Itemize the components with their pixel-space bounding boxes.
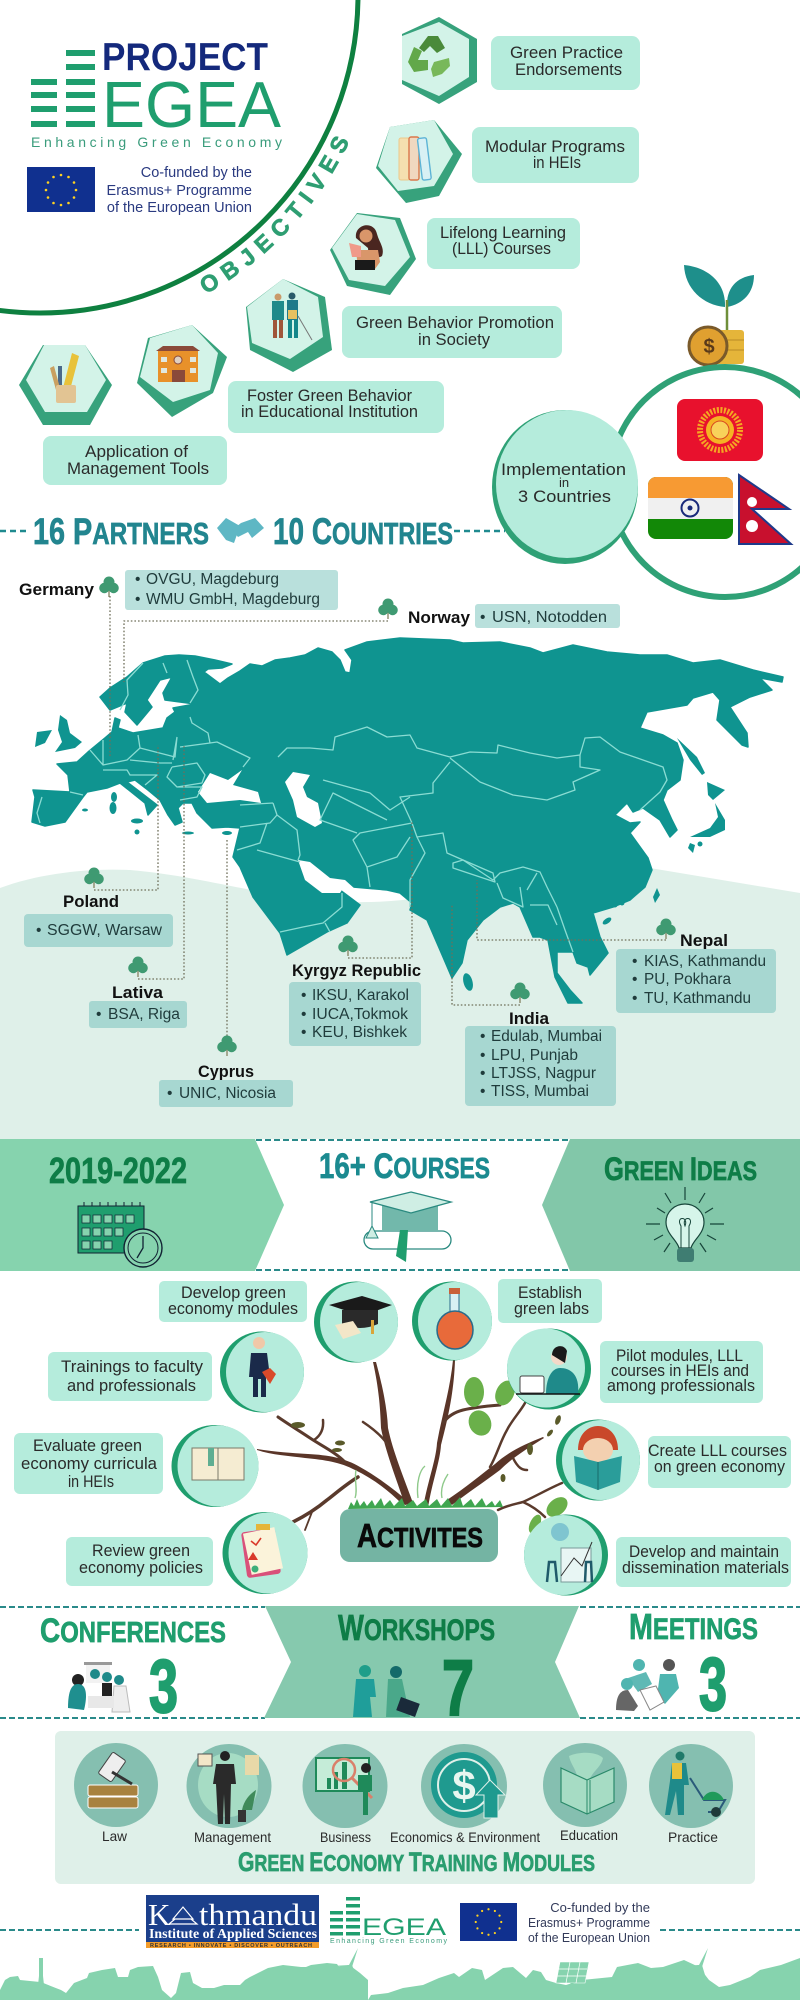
EU flag — [27, 167, 95, 212]
partner list: • — [632, 990, 637, 1007]
partner: India: India — [509, 1009, 550, 1028]
connector: Latvia — [138, 745, 184, 979]
partner list: BSA, Riga — [108, 1006, 180, 1023]
ring: implementation countries — [610, 367, 800, 597]
label — [616, 1537, 791, 1587]
co-funded text: Co-funded by the — [550, 1900, 650, 1915]
partner list: • — [480, 609, 485, 626]
corner triangle — [0, 0, 66, 66]
label: green labs — [514, 1299, 589, 1318]
partner: Nepal — [616, 918, 776, 1013]
connector: Cyprus — [226, 840, 228, 1036]
partner list — [475, 604, 620, 628]
partner list: LPU, Punjab — [491, 1047, 578, 1064]
logo: Kathmandu Institute of Applied Sciences — [146, 1895, 319, 1949]
label — [472, 127, 639, 183]
activity: green labs — [412, 1279, 602, 1360]
callout: implementation in 3 countries: Implementation — [501, 460, 626, 479]
label: Application of — [85, 442, 188, 461]
panel: green economy training modules — [55, 1731, 755, 1884]
center turbine — [332, 1948, 360, 2000]
logo: EGEA small: Enhancing Green Economy — [330, 1938, 448, 1945]
label: Develop and maintain — [629, 1542, 779, 1561]
partner list: IUCA,Tokmok — [312, 1006, 408, 1023]
objective 5: educational institutions — [137, 325, 444, 433]
label: Modular Programs — [485, 137, 625, 156]
co-funded text: Co-funded by the — [141, 165, 252, 181]
panel: 2019-2022 — [0, 1139, 284, 1271]
partner: Latvia: Lativa — [112, 983, 164, 1002]
partner: Poland — [24, 868, 173, 947]
label — [648, 1436, 791, 1488]
band: key facts — [0, 1139, 800, 1271]
EU co-funding footer — [460, 1900, 650, 1945]
label: in HEIs — [68, 1472, 114, 1491]
label: in Educational Institution — [241, 402, 418, 421]
module: economics and environment: Economics & Environment — [390, 1829, 540, 1845]
partner list: OVGU, Magdeburg — [146, 571, 279, 588]
label: in Society — [418, 330, 490, 349]
icon: calendar and clock — [78, 1202, 162, 1267]
module: management: Management — [194, 1829, 271, 1845]
label: Pilot modules, LLL — [616, 1346, 743, 1365]
tree marker — [656, 918, 676, 939]
partner: Poland: Poland — [63, 892, 119, 911]
icon: graduation cap and scroll — [364, 1192, 451, 1262]
panel title: GREEN ECONOMY TRAINING MODULES — [238, 1847, 595, 1877]
module: economics and environment — [390, 1744, 540, 1845]
logo: Project EGEA — [31, 36, 282, 150]
partner list: KEU, Bishkek — [312, 1024, 407, 1041]
partner list: TISS, Mumbai — [491, 1083, 589, 1100]
icon: conference people — [68, 1662, 130, 1712]
label: Trainings to faculty — [61, 1357, 203, 1376]
co-funded text: of the European Union — [528, 1930, 650, 1945]
partner list: • — [167, 1085, 172, 1102]
partner: Germany: Germany — [19, 580, 95, 599]
label: on green economy — [654, 1457, 785, 1476]
co-funded text: Erasmus+ Programme — [107, 183, 252, 199]
partner list — [24, 914, 173, 947]
partner list: KIAS, Kathmandu — [644, 953, 766, 970]
number: 3 meetings: 3 — [699, 1642, 727, 1726]
objective 6: management tools — [19, 345, 227, 485]
label — [342, 306, 562, 358]
icon: handshake — [217, 518, 264, 543]
module: practice: Practice — [668, 1829, 718, 1845]
branches — [257, 1360, 562, 1530]
heading: objectives: OBJECTIVES — [200, 136, 348, 292]
connector: Kyrgyz Republic — [348, 820, 412, 958]
skyline silhouette — [0, 1958, 800, 2000]
label: Lifelong Learning — [440, 223, 566, 242]
partner: Germany — [19, 570, 338, 610]
icon: plant growing from coins — [684, 265, 754, 365]
module: education: Education — [560, 1827, 618, 1843]
activity: dissemination materials — [524, 1514, 791, 1596]
partner list — [125, 570, 338, 610]
solar panel — [556, 1962, 589, 1992]
number: 7 workshops: 7 — [442, 1643, 474, 1732]
callout: implementation in 3 countries — [492, 410, 638, 564]
hexagon with workers icon — [246, 279, 332, 372]
leaves — [464, 1377, 571, 1535]
panel: conferences: CONFERENCES — [40, 1612, 226, 1650]
label — [43, 436, 227, 485]
label — [498, 1279, 602, 1323]
label — [48, 1352, 212, 1401]
partner list: PU, Pokhara — [644, 971, 731, 988]
partner list: • — [301, 987, 306, 1004]
partner list: • — [96, 1006, 101, 1023]
panel: 16+ courses: 16+ COURSES — [319, 1147, 490, 1186]
hexagon with pencil cup icon — [19, 345, 112, 425]
hexagon with reader icon — [330, 213, 416, 295]
connector: Poland — [94, 745, 158, 890]
flag: Kyrgyz Republic — [677, 399, 763, 461]
module: management — [186, 1744, 272, 1845]
panel: meetings: MEETINGS — [629, 1606, 758, 1647]
objective 4: green behavior in society — [246, 279, 562, 372]
objective 1: green practice — [402, 17, 640, 104]
logo: Kathmandu Institute of Applied Sciences: RESEARCH • INNOVATE • DISCOVER • OUTREACH — [150, 1943, 312, 1949]
label — [66, 1537, 213, 1586]
partner list: LTJSS, Nagpur — [491, 1065, 596, 1082]
panel: 16+ courses — [319, 1147, 490, 1262]
panel: meetings — [616, 1606, 758, 1726]
partner list: • — [36, 922, 41, 939]
activity: review policies — [66, 1512, 308, 1594]
logo word PROJECT: PROJECT — [102, 36, 268, 79]
label — [14, 1433, 163, 1494]
activity: trainings — [48, 1332, 304, 1412]
partner: Cyprus: Cyprus — [198, 1062, 254, 1081]
module: law: Law — [102, 1828, 128, 1844]
module: law — [74, 1743, 158, 1844]
partner list: SGGW, Warsaw — [47, 922, 163, 939]
logo: Kathmandu Institute of Applied Sciences: Institute of Applied Sciences — [149, 1927, 318, 1942]
tree marker — [217, 1036, 237, 1056]
objective 3: lifelong learning — [330, 213, 580, 295]
grass — [348, 1466, 503, 1509]
module: practice — [649, 1744, 733, 1845]
label: economy policies — [79, 1558, 203, 1577]
circle icon: flask — [412, 1282, 492, 1360]
landmass — [32, 638, 783, 1003]
icon: two people shaking hands — [353, 1665, 420, 1717]
partner list: Edulab, Mumbai — [491, 1028, 602, 1045]
dark leaves — [291, 1414, 562, 1482]
partner: India — [465, 982, 616, 1106]
connector: Norway — [124, 621, 388, 682]
label: and professionals — [67, 1376, 196, 1395]
partner list: • — [480, 1083, 485, 1100]
dashed band edges — [256, 1140, 570, 1270]
circle icon: charts and people — [524, 1514, 608, 1596]
footer dashes — [0, 1929, 800, 1931]
partner list — [465, 1026, 616, 1106]
partner: Norway — [378, 598, 620, 628]
flag: India — [648, 477, 733, 539]
logo word EGEA: EGEA — [102, 68, 282, 141]
panel: green ideas — [542, 1139, 800, 1271]
label: Create LLL courses — [648, 1441, 787, 1460]
partner: Cyprus — [159, 1036, 293, 1107]
partner: Norway: Norway — [408, 608, 471, 627]
logo: EGEA small — [330, 1897, 448, 1945]
connector: Nepal — [477, 880, 666, 940]
hexagon with recycle icon — [402, 17, 477, 104]
label — [159, 1281, 307, 1322]
logo bars — [31, 50, 95, 127]
partner list: • — [480, 1065, 485, 1082]
tree of activities — [257, 1360, 571, 1535]
co-funded text: Erasmus+ Programme — [528, 1915, 650, 1930]
partner: Kyrgyz Republic — [289, 936, 421, 1046]
panel: 2019-2022: 2019-2022 — [49, 1150, 187, 1191]
map: Eurasia — [32, 638, 783, 1003]
tree marker — [128, 956, 148, 977]
co-funded text — [107, 165, 252, 216]
activity: create LLL courses — [556, 1420, 791, 1500]
icon: light bulb — [646, 1187, 724, 1262]
partner list: • — [480, 1047, 485, 1064]
partner list: • — [135, 571, 140, 588]
circle icon: child reading — [556, 1420, 640, 1500]
header arc — [0, 0, 358, 313]
label: Develop green — [181, 1283, 286, 1302]
circle icon: presenter — [220, 1332, 304, 1412]
label: Endorsements — [515, 60, 622, 79]
partner list: WMU GmbH, Magdeburg — [146, 591, 320, 608]
right turbine — [680, 1948, 708, 2000]
module: business — [302, 1744, 388, 1845]
label: courses in HEIs and — [611, 1361, 749, 1380]
panel: workshops — [264, 1606, 580, 1732]
tree marker — [378, 598, 398, 619]
label — [228, 381, 444, 433]
label: economy modules — [168, 1299, 298, 1318]
partner list: • — [135, 591, 140, 608]
inland seas — [198, 770, 355, 893]
connector: India — [452, 905, 520, 1005]
partner list — [616, 949, 776, 1013]
partner list — [89, 1001, 187, 1028]
partner list: IKSU, Karakol — [312, 987, 409, 1004]
icon: plant growing from coins: $ — [703, 336, 715, 358]
callout: implementation in 3 countries: in — [559, 475, 569, 490]
hexagon with books icon — [376, 120, 462, 203]
co-funded text — [528, 1900, 650, 1945]
tree marker — [338, 936, 358, 956]
circle icon: graduation cap — [314, 1282, 398, 1362]
10 countries: 10 COUNTRIES — [273, 511, 453, 552]
country borders — [37, 660, 667, 952]
activity: pilot modules — [507, 1328, 763, 1410]
tree marker — [84, 868, 104, 888]
label: Evaluate green — [33, 1436, 142, 1455]
16 partners: 16 PARTNERS — [33, 511, 209, 552]
module: business: Business — [320, 1829, 371, 1845]
label: Review green — [92, 1541, 190, 1560]
label: Green Practice — [510, 43, 623, 62]
logo: EGEA small: EGEA — [362, 1914, 446, 1941]
label — [427, 218, 580, 269]
logo: Kathmandu Institute of Applied Sciences: K — [148, 1897, 171, 1932]
label: Foster Green Behavior — [247, 386, 412, 405]
partner list: • — [480, 1028, 485, 1045]
hexagon with building icon — [137, 325, 227, 417]
partner list: • — [632, 971, 637, 988]
partner list: • — [632, 953, 637, 970]
panel: conferences — [40, 1612, 226, 1728]
islands — [35, 715, 725, 992]
partner: Kyrgyz Republic: Kyrgyz Republic — [292, 961, 421, 980]
partner: Latvia — [89, 956, 187, 1028]
partner list — [159, 1080, 293, 1107]
logo: Kathmandu Institute of Applied Sciences: thmandu — [199, 1897, 317, 1932]
co-funded text: of the European Union — [107, 200, 252, 216]
EU co-funding block — [27, 165, 252, 216]
partner list: UNIC, Nicosia — [179, 1085, 276, 1102]
circle icon: clipboard — [222, 1512, 308, 1594]
label — [491, 36, 640, 90]
tree marker — [99, 576, 119, 597]
module: economics and environment: $ — [452, 1762, 476, 1809]
module: education — [543, 1743, 627, 1843]
label: Green Behavior Promotion — [356, 313, 554, 332]
stats band: events — [0, 1606, 800, 1732]
circle icon: laptop user — [507, 1328, 591, 1410]
partner: Nepal: Nepal — [680, 931, 728, 950]
panel: green ideas: GREEN IDEAS — [604, 1151, 757, 1187]
label: economy curricula — [21, 1454, 158, 1473]
skyline with wind turbines and solar panel — [0, 1948, 800, 2000]
icon: meeting people — [616, 1659, 679, 1711]
callout: implementation in 3 countries: 3 Countries — [518, 487, 611, 506]
circle icon: open book — [172, 1425, 258, 1507]
activity: develop modules — [159, 1281, 398, 1362]
objective 2: modular programs — [376, 120, 639, 203]
partner list: USN, Notodden — [492, 609, 607, 626]
dashed band edges — [0, 1607, 800, 1718]
activity: evaluate curricula — [14, 1425, 258, 1507]
partner list — [289, 982, 421, 1046]
EU flag — [460, 1903, 517, 1941]
panel: workshops: WORKSHOPS — [338, 1607, 495, 1648]
label: among professionals — [607, 1376, 755, 1395]
partner list: • — [301, 1024, 306, 1041]
label: in HEIs — [533, 153, 581, 172]
label: Management Tools — [67, 459, 209, 478]
box: activities — [340, 1509, 498, 1562]
logo tagline: Enhancing Green Economy — [31, 134, 282, 150]
box: activities: ACTIVITES — [357, 1517, 483, 1554]
label: dissemination materials — [622, 1558, 789, 1577]
tree marker — [510, 982, 530, 1003]
label: (LLL) Courses — [452, 239, 551, 258]
flag: Nepal — [739, 475, 791, 544]
connector: Germany — [109, 596, 111, 757]
left turbine — [22, 1958, 60, 2000]
map background wave — [0, 867, 800, 1139]
partners and countries headline — [0, 511, 505, 552]
partner list: • — [301, 1006, 306, 1023]
label — [600, 1341, 763, 1403]
number: 3 conferences: 3 — [149, 1644, 178, 1728]
partner list: TU, Kathmandu — [644, 990, 751, 1007]
label: Establish — [518, 1283, 582, 1302]
